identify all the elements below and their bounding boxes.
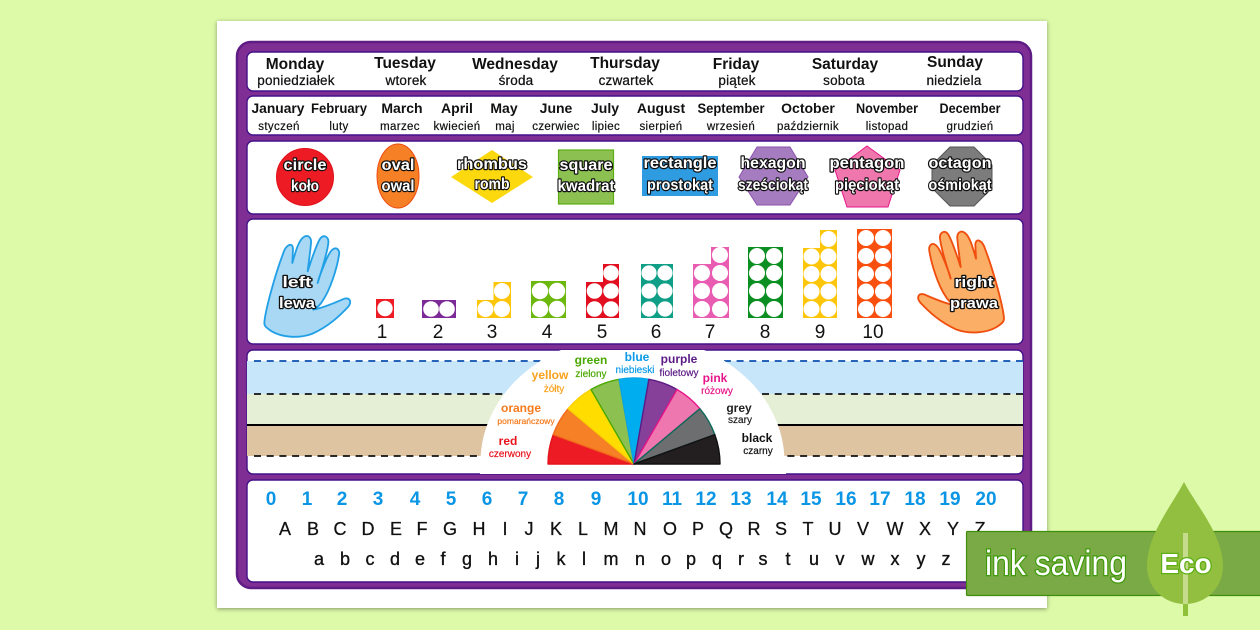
lowercase alphabet: f bbox=[440, 549, 446, 569]
uppercase alphabet: A bbox=[279, 519, 291, 539]
panel: months of the year: wrzesień bbox=[706, 121, 755, 133]
lowercase alphabet: e bbox=[415, 549, 425, 569]
panel: days of the week: Saturday bbox=[812, 56, 879, 73]
lowercase alphabet: k bbox=[556, 549, 566, 569]
panel: days of the week: Wednesday bbox=[472, 56, 558, 73]
shape: oval: oval bbox=[382, 157, 414, 174]
shape: circle: circle bbox=[284, 157, 327, 174]
uppercase alphabet bbox=[279, 519, 986, 539]
panel: months of the year: listopad bbox=[866, 121, 908, 133]
shape: hexagon: sześciokąt bbox=[738, 177, 809, 194]
colour labels: czarny bbox=[743, 446, 773, 457]
panel: days of the week: środa bbox=[499, 73, 534, 88]
shape: octagon bbox=[928, 147, 992, 206]
panel: days of the week: Thursday bbox=[590, 55, 660, 72]
uppercase alphabet: T bbox=[802, 519, 814, 539]
lowercase alphabet: t bbox=[785, 549, 791, 569]
panel: months of the year: kwiecień bbox=[434, 121, 480, 133]
lowercase alphabet: u bbox=[809, 549, 819, 569]
panel: months of the year: February bbox=[311, 100, 367, 116]
lowercase alphabet: q bbox=[712, 549, 722, 569]
uppercase alphabet: H bbox=[472, 519, 486, 539]
shape: circle: koło bbox=[291, 178, 319, 195]
numicon 1 bbox=[376, 299, 394, 343]
lowercase alphabet: h bbox=[488, 549, 498, 569]
icon: left hand: lewa bbox=[279, 295, 316, 312]
colour labels: orange bbox=[501, 401, 541, 415]
shape: rectangle: rectangle bbox=[644, 155, 717, 172]
lowercase alphabet: d bbox=[390, 549, 400, 569]
number line 0-20: 10 bbox=[627, 489, 649, 510]
panel: months of the year: September bbox=[698, 100, 765, 116]
colour labels: czerwony bbox=[489, 449, 531, 460]
panel: months of the year: May bbox=[490, 100, 518, 116]
uppercase alphabet: B bbox=[307, 519, 319, 539]
numicon 3 bbox=[477, 282, 511, 343]
panel: days of the week: sobota bbox=[823, 73, 865, 88]
colour labels: yellow bbox=[532, 368, 569, 382]
lowercase alphabet: a bbox=[314, 549, 325, 569]
panel: months of the year: October bbox=[781, 100, 835, 116]
uppercase alphabet: Y bbox=[947, 519, 959, 539]
number line 0-20 bbox=[266, 489, 997, 510]
panel: months of the year: sierpień bbox=[639, 121, 683, 133]
uppercase alphabet: E bbox=[390, 519, 402, 539]
number line 0-20: 20 bbox=[975, 489, 997, 510]
numicon 9: 9 bbox=[815, 322, 825, 343]
purple frame bbox=[237, 42, 1031, 588]
panel: writing lines and colours bbox=[246, 349, 1024, 475]
number line 0-20: 16 bbox=[835, 489, 857, 510]
lowercase alphabet: m bbox=[604, 549, 618, 569]
colour labels: zielony bbox=[575, 369, 607, 380]
number line 0-20: 4 bbox=[410, 489, 421, 510]
panel: months of the year: August bbox=[637, 100, 685, 116]
panel: months of the year: styczeń bbox=[258, 121, 300, 133]
colour labels: green bbox=[575, 353, 607, 367]
colour labels: szary bbox=[728, 415, 752, 426]
numicon 10: 10 bbox=[862, 322, 884, 343]
number line 0-20: 18 bbox=[904, 489, 926, 510]
lowercase alphabet bbox=[314, 549, 950, 569]
panel: counting bbox=[247, 219, 1023, 344]
number line 0-20: 2 bbox=[337, 489, 347, 510]
uppercase alphabet: G bbox=[443, 519, 457, 539]
number line 0-20: 11 bbox=[662, 489, 682, 510]
leaf stem bbox=[1183, 533, 1188, 616]
uppercase alphabet: M bbox=[604, 519, 618, 539]
numicon 7 bbox=[693, 247, 729, 343]
panel: months of the year: December bbox=[940, 100, 1001, 116]
panel: months of the year: January bbox=[252, 100, 305, 116]
numicon 5 bbox=[586, 264, 619, 343]
uppercase alphabet: Q bbox=[719, 519, 733, 539]
panel: days of the week: poniedziałek bbox=[257, 73, 335, 88]
shape: square: kwadrat bbox=[558, 178, 615, 195]
lowercase alphabet: c bbox=[366, 549, 374, 569]
shape: pentagon bbox=[830, 146, 904, 207]
panel: months of the year bbox=[247, 96, 1023, 135]
numicon 8: 8 bbox=[760, 322, 770, 343]
shape: oval bbox=[377, 144, 419, 208]
colour labels: grey bbox=[726, 401, 752, 415]
uppercase alphabet: F bbox=[416, 519, 428, 539]
banner text: ink saving: ink saving bbox=[985, 544, 1127, 583]
colour labels: pink bbox=[703, 371, 728, 385]
panel: months of the year: June bbox=[540, 100, 573, 116]
panel: months of the year: July bbox=[591, 100, 619, 116]
lowercase alphabet: r bbox=[738, 549, 744, 569]
panel: months of the year: marzec bbox=[380, 121, 420, 133]
numicon 2 bbox=[422, 300, 456, 343]
numicon 6: 6 bbox=[651, 322, 661, 343]
shape: square bbox=[558, 150, 615, 204]
shape: rhombus: romb bbox=[474, 176, 510, 193]
uppercase alphabet: C bbox=[334, 519, 346, 539]
lowercase alphabet: i bbox=[515, 549, 519, 569]
uppercase alphabet: J bbox=[524, 519, 534, 539]
number line 0-20: 9 bbox=[591, 489, 601, 510]
number line 0-20: 7 bbox=[518, 489, 528, 510]
shape: hexagon: hexagon bbox=[740, 155, 806, 172]
shape: rectangle: prostokąt bbox=[647, 177, 714, 194]
uppercase alphabet: W bbox=[886, 519, 904, 539]
numicon 4 bbox=[531, 281, 566, 343]
uppercase alphabet: V bbox=[857, 519, 869, 539]
number line 0-20: 14 bbox=[766, 489, 788, 510]
number line 0-20: 0 bbox=[266, 489, 276, 510]
colour labels: blue bbox=[625, 350, 650, 364]
uppercase alphabet: P bbox=[692, 519, 704, 539]
panel: months of the year: March bbox=[381, 100, 423, 116]
number line 0-20: 15 bbox=[800, 489, 822, 510]
colour labels: red bbox=[499, 434, 517, 448]
shape: pentagon: pentagon bbox=[830, 155, 904, 172]
panel: months of the year: lipiec bbox=[592, 121, 620, 133]
panel: months of the year: maj bbox=[495, 121, 515, 133]
uppercase alphabet: U bbox=[828, 519, 842, 539]
eco banner bbox=[966, 482, 1260, 616]
panel: days of the week: wtorek bbox=[385, 73, 427, 88]
uppercase alphabet: Z bbox=[974, 519, 986, 539]
shape: oval: owal bbox=[382, 178, 414, 195]
numicon 9 bbox=[803, 230, 837, 343]
uppercase alphabet: N bbox=[634, 519, 646, 539]
panel: numbers and alphabet bbox=[247, 480, 1023, 582]
shape: square: square bbox=[560, 157, 613, 174]
numicon 10 bbox=[857, 229, 892, 343]
icon: right hand bbox=[918, 232, 1004, 332]
number line 0-20: 3 bbox=[373, 489, 383, 510]
panel: months of the year: grudzień bbox=[947, 121, 993, 133]
shape: octagon: ośmiokąt bbox=[928, 177, 992, 194]
panel: shapes bbox=[247, 141, 1023, 214]
lowercase alphabet: j bbox=[535, 549, 540, 569]
numicon 3: 3 bbox=[487, 322, 497, 343]
panel: months of the year: April bbox=[441, 100, 473, 116]
panel: days of the week: Tuesday bbox=[374, 55, 436, 72]
number line 0-20: 17 bbox=[869, 489, 891, 510]
shape: rectangle bbox=[642, 155, 718, 196]
number line 0-20: 5 bbox=[446, 489, 457, 510]
icon: left hand bbox=[264, 236, 350, 337]
numicon 2: 2 bbox=[433, 322, 443, 343]
lowercase alphabet: o bbox=[661, 549, 671, 569]
panel: days of the week: piątek bbox=[718, 73, 756, 88]
banner text: Eco: Eco bbox=[1160, 548, 1212, 579]
colour labels: black bbox=[742, 431, 773, 445]
panel: days of the week bbox=[247, 52, 1023, 91]
lowercase alphabet: s bbox=[758, 549, 768, 569]
panel: days of the week: Friday bbox=[713, 56, 760, 73]
numicon 5: 5 bbox=[597, 322, 607, 343]
lowercase alphabet: n bbox=[635, 549, 645, 569]
panel: days of the week: czwartek bbox=[599, 73, 653, 88]
colour labels: różowy bbox=[701, 386, 733, 397]
uppercase alphabet: S bbox=[775, 519, 787, 539]
lowercase alphabet: b bbox=[340, 549, 350, 569]
uppercase alphabet: O bbox=[663, 519, 677, 539]
uppercase alphabet: K bbox=[550, 519, 562, 539]
colour labels bbox=[489, 350, 773, 460]
icon: left hand: left bbox=[282, 274, 312, 291]
uppercase alphabet: R bbox=[748, 519, 760, 539]
lowercase alphabet: w bbox=[860, 549, 876, 569]
number line 0-20: 19 bbox=[939, 489, 961, 510]
icon: right hand: right bbox=[954, 274, 994, 291]
shape: rhombus bbox=[451, 150, 533, 203]
shape: octagon: octagon bbox=[928, 155, 992, 172]
numicon 1: 1 bbox=[377, 322, 387, 343]
uppercase alphabet: L bbox=[578, 519, 588, 539]
shape: hexagon bbox=[738, 147, 809, 205]
shape: circle bbox=[276, 148, 334, 206]
lowercase alphabet: y bbox=[916, 549, 926, 569]
white sheet bbox=[217, 21, 1047, 608]
lowercase alphabet: g bbox=[462, 549, 472, 569]
panel: months of the year: październik bbox=[777, 121, 839, 133]
panel: months of the year: November bbox=[856, 100, 918, 116]
numicon 4: 4 bbox=[542, 322, 553, 343]
panel: months of the year: czerwiec bbox=[532, 121, 580, 133]
uppercase alphabet: X bbox=[919, 519, 931, 539]
colour labels: fioletowy bbox=[660, 368, 698, 379]
colour labels: purple bbox=[661, 352, 698, 366]
colour labels: pomarańczowy bbox=[497, 416, 555, 426]
number line 0-20: 12 bbox=[695, 489, 717, 510]
panel: days of the week: Monday bbox=[266, 56, 325, 73]
colour labels: żółty bbox=[544, 384, 564, 395]
numicon 6 bbox=[641, 264, 673, 343]
panel: days of the week: Sunday bbox=[927, 54, 983, 71]
uppercase alphabet: I bbox=[502, 519, 508, 539]
lowercase alphabet: l bbox=[582, 549, 586, 569]
uppercase alphabet: D bbox=[362, 519, 374, 539]
lowercase alphabet: z bbox=[942, 549, 950, 569]
lowercase alphabet: p bbox=[686, 549, 696, 569]
lowercase alphabet: v bbox=[836, 549, 844, 569]
colour labels: niebieski bbox=[616, 365, 654, 376]
icon: right hand: prawa bbox=[950, 295, 999, 312]
numicon 8 bbox=[748, 247, 783, 343]
chart: colour fan bbox=[548, 378, 720, 464]
panel: days of the week: niedziela bbox=[926, 73, 982, 88]
shape: rhombus: rhombus bbox=[457, 156, 527, 173]
number line 0-20: 8 bbox=[554, 489, 564, 510]
number line 0-20: 13 bbox=[730, 489, 752, 510]
panel: months of the year: luty bbox=[329, 121, 349, 133]
number line 0-20: 6 bbox=[482, 489, 492, 510]
numicon 7: 7 bbox=[705, 322, 715, 343]
number line 0-20: 1 bbox=[302, 489, 313, 510]
shape: pentagon: pięciokąt bbox=[835, 177, 900, 194]
icon: leaf drop bbox=[1147, 482, 1223, 604]
lowercase alphabet: x bbox=[890, 549, 900, 569]
